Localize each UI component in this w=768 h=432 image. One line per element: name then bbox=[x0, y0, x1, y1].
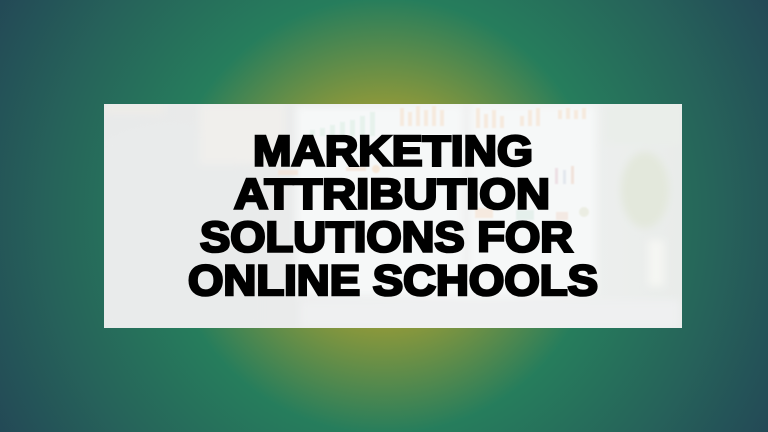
blurred photo: desk bbox=[300, 300, 680, 328]
title line 3: SOLUTIONS FOR bbox=[200, 215, 573, 262]
blurred photo: plant and vase bbox=[621, 152, 668, 283]
title bbox=[188, 129, 598, 305]
title line 1: MARKETING bbox=[253, 129, 533, 176]
title line 2: ATTRIBUTION bbox=[234, 172, 550, 219]
panel base bbox=[104, 104, 682, 328]
blurred photo: person silhouette bbox=[104, 104, 286, 328]
blurred photo: monitors bbox=[296, 104, 596, 296]
panel: title card with blurred office photo bbox=[104, 104, 682, 328]
title line 4: ONLINE SCHOOLS bbox=[188, 258, 598, 305]
blurred photo: chart bars bbox=[278, 106, 589, 220]
